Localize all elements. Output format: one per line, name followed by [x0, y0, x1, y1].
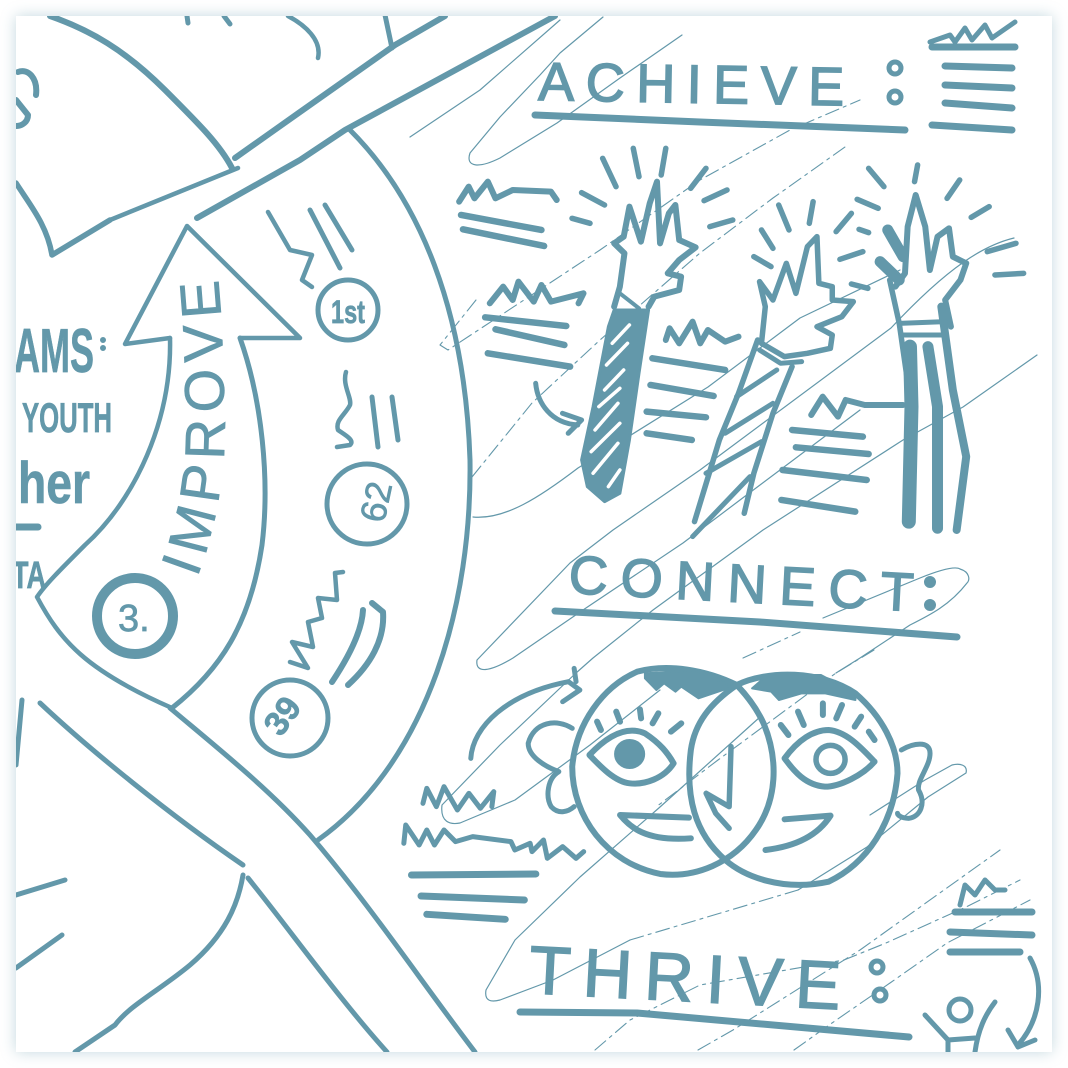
note between arm 2 and arm 3	[781, 397, 903, 512]
arm 1	[572, 148, 733, 502]
curved arrow	[536, 383, 582, 433]
arm 2 rays	[754, 202, 869, 288]
rank 62	[327, 372, 407, 544]
left panel handwritten text: TA	[12, 555, 46, 597]
colon after AMS	[100, 338, 106, 350]
note left of faces	[404, 787, 584, 919]
note above arm 1	[459, 182, 557, 246]
heading: connect: CONNECT	[567, 545, 915, 623]
left eye	[589, 731, 674, 784]
outer arc of improve segment	[318, 130, 470, 840]
note between arm 1 and arm 2	[647, 322, 739, 440]
rank 1st: 1st	[331, 294, 365, 330]
left panel handwritten text	[16, 328, 110, 588]
achieve note top right	[930, 22, 1015, 130]
top-left map shape with road lines	[16, 15, 555, 255]
left face	[528, 668, 774, 875]
arm 3 rays	[857, 165, 1024, 275]
left mouth	[620, 815, 691, 839]
left panel handwritten text: AMS	[14, 317, 94, 386]
arm 2	[693, 202, 869, 537]
rank 62: 62	[352, 478, 400, 526]
arm 1 rays	[572, 148, 733, 227]
overlapping faces illustration	[404, 668, 930, 919]
left ear	[528, 723, 574, 812]
improve arrow	[34, 224, 302, 709]
right face	[689, 675, 930, 885]
step number 3: 3.	[118, 598, 150, 640]
rank 39: 39	[256, 690, 309, 743]
left hair	[645, 670, 733, 698]
note left of arm 1	[485, 282, 584, 433]
curved arrow to person	[1008, 958, 1039, 1047]
ranking notes inside arc	[252, 205, 407, 756]
heading: achieve: ACHIEVE	[538, 52, 845, 117]
arrow label: IMPROVE	[162, 282, 226, 574]
right hair	[752, 675, 855, 700]
arm 3	[857, 165, 1024, 530]
right mouth	[765, 816, 831, 850]
left panel handwritten text: her	[18, 451, 90, 516]
heading: thrive: THRIVE	[527, 932, 843, 1024]
thrive note bottom right	[950, 880, 1032, 952]
rank 1st	[268, 205, 378, 340]
raised arms illustration	[459, 148, 1024, 537]
background scribble hatching	[410, 17, 1037, 1001]
rank 39	[252, 572, 383, 756]
right eye	[785, 730, 875, 787]
heading: achieve	[535, 52, 905, 130]
step number 3	[97, 578, 173, 654]
left panel handwritten text: YOUTH	[22, 394, 112, 441]
shared nose	[706, 747, 731, 828]
road and lower shapes	[16, 700, 475, 1052]
icon: cheering person	[925, 999, 995, 1052]
curved arrow to face	[471, 668, 580, 758]
right ear	[898, 744, 930, 818]
